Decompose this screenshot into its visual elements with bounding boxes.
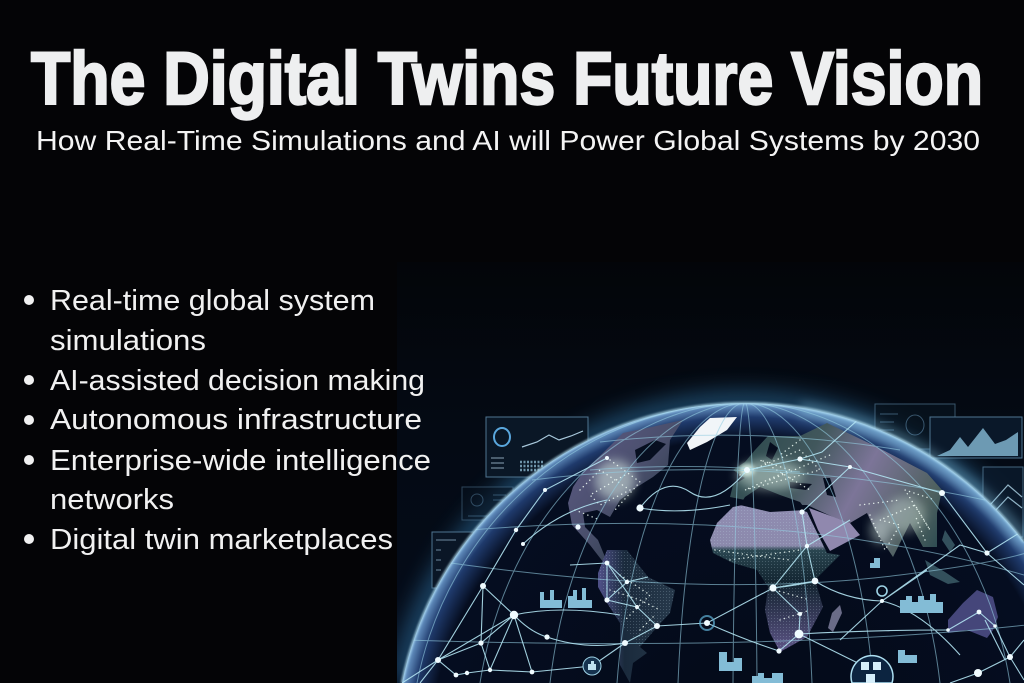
globe bright rim [402,403,1024,683]
bullet: intelligence networks: Enterprise-wide intelligence [50,445,431,477]
dashboards behind the globe [432,404,1023,588]
bullet: real-time simulations [24,285,375,357]
image background [397,340,1024,683]
seas [740,442,836,512]
icon: hub ring with grid [851,656,893,683]
network nodes [435,456,1013,677]
bullet: AI decision making: AI-assisted decision making [50,365,425,397]
bullet: intelligence networks [24,445,431,516]
bullet: marketplaces: Digital twin marketplaces [50,524,393,556]
icon: factory bottom [719,652,742,671]
continent: australia [948,590,998,638]
continent: arabia [809,508,860,551]
dashboard: small gauges left [462,487,513,520]
bright upper-right atmosphere band [800,410,1024,542]
dashboard: intelligent network far right [983,467,1023,537]
dashboard: predictive analytics chart left [432,532,474,588]
continent: africa [710,500,840,652]
globe atmospheric glow [402,403,1024,683]
subtitle: How Real-Time Simulations and AI will Power Global Systems by 2030 [36,125,980,156]
industrial icons [540,558,943,683]
icon: south atlantic hub [583,657,601,675]
network links [402,400,1024,683]
hudson bay [635,440,666,463]
bullet: real-time simulations: simulations [50,325,206,357]
icon: factory left [540,590,562,608]
bullet: autonomous infrastructure: Autonomous infrastructure [50,404,422,436]
bullet list [24,285,431,556]
globe content clipped [402,400,1024,683]
continents [568,417,998,683]
icon: buildings bottom [752,673,783,683]
dashboard: peak area chart right [930,417,1022,458]
latitude and longitude grid [405,403,1024,683]
land mesh texture [598,500,840,652]
icon: refinery left [568,588,592,608]
dashboard: gauge top right [875,404,955,449]
city light speckles [575,440,935,630]
dashboard: predictive analytics top left [486,417,588,477]
icon: buildings centre right [870,558,880,568]
continent: north america [568,420,683,567]
icon: city skyline right [900,594,943,613]
island: madagascar [828,605,842,632]
continent: greenland [687,417,737,450]
southeast asia islands [925,530,960,584]
icon: ring centre right [877,586,887,596]
icon: factory bottom right [898,650,917,663]
bullet: real-time simulations: Real-time global system [50,285,375,317]
bullet: intelligence networks: networks [50,484,174,516]
continent: south america [598,550,675,683]
globe body [402,403,1024,683]
earth network image [397,340,1024,683]
icon: mid ocean node ring [700,616,714,630]
continent: eurasia [730,423,942,557]
city light glows [595,460,925,544]
